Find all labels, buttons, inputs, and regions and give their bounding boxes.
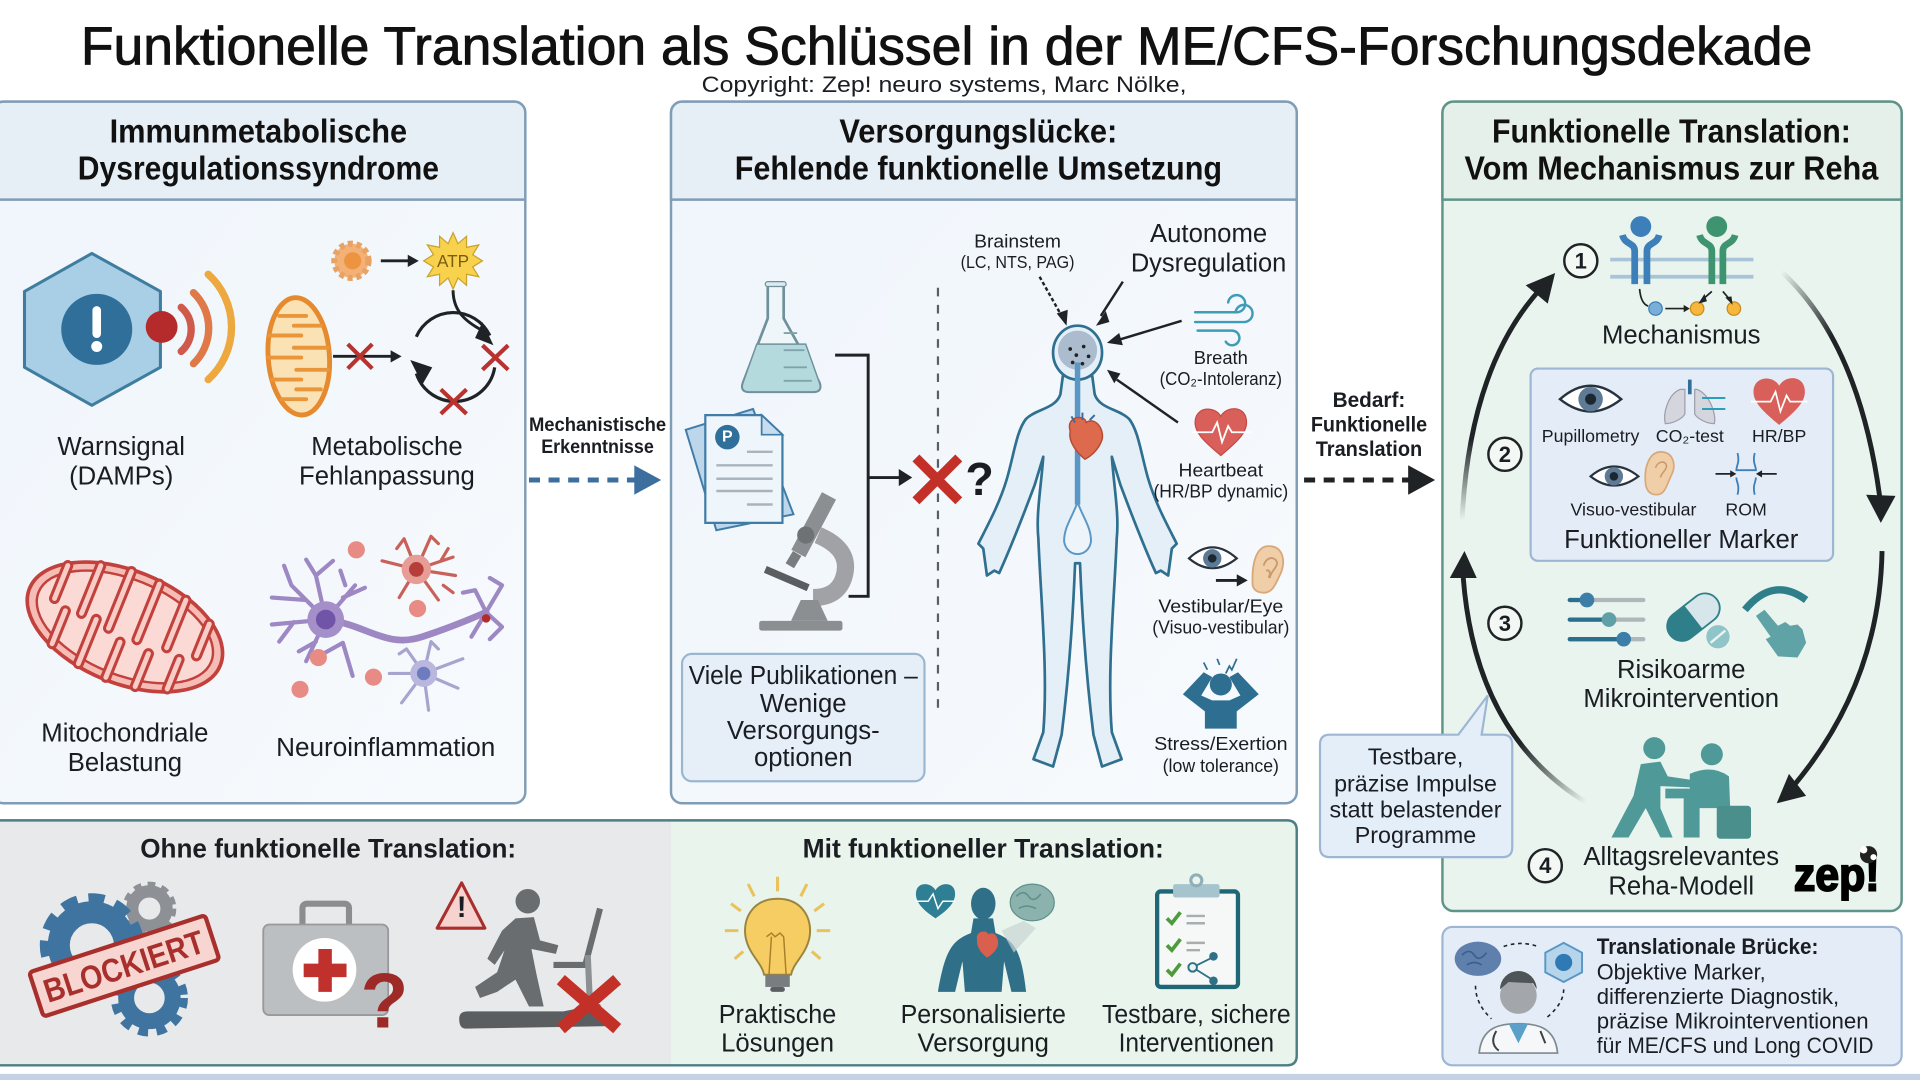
text: bridge description: Translationale Brücke:	[1597, 934, 1818, 959]
label: Personalisierte Versorgung: Versorgung	[918, 1029, 1049, 1057]
heading: Funktionelle Translation:	[1492, 114, 1851, 151]
label: Metabolische Fehlanpassung: Fehlanpassung	[299, 462, 475, 490]
text: bridge description: für ME/CFS und Long COVID	[1597, 1033, 1873, 1058]
arrows: inputs to brainstem	[1040, 277, 1182, 422]
label: Vestibular: (Visuo-vestibular)	[1152, 616, 1289, 637]
callout: Viele Publikationen: optionen	[754, 744, 853, 772]
step numbers: 4	[1539, 853, 1552, 878]
step numbers: 3	[1499, 611, 1511, 636]
stamp: BLOCKIERT: BLOCKIERT	[39, 924, 209, 1011]
label: Funktioneller Marker: Funktioneller Marker	[1564, 526, 1799, 554]
heading: ohne: Ohne funktionelle Translation:	[140, 834, 516, 864]
icon: blocked gears	[29, 885, 219, 1032]
label: Breath	[1160, 347, 1282, 389]
icon: medical kit with question: ?	[361, 956, 408, 1044]
icon: red mitochondrion	[8, 536, 241, 718]
arrow: Mechanistische Erkenntnisse: Mechanistische	[529, 414, 666, 436]
heading: Versorgungslücke:	[839, 114, 1117, 151]
text: bridge description: differenzierte Diagnostik,	[1597, 984, 1839, 1009]
icon: personalised care person	[916, 884, 1054, 992]
divider: dashed line	[937, 288, 939, 710]
icon: joint ROM	[1716, 453, 1777, 495]
arrow: Bedarf Funktionelle Translation: Translation	[1316, 438, 1422, 461]
label: Autonome Dysregulation: Dysregulation	[1131, 249, 1286, 277]
icon: neuron and inflammation	[272, 536, 502, 710]
text: bridge description: präzise Mikrointerventionen	[1597, 1009, 1869, 1034]
icon: receptors mechanism	[1610, 216, 1753, 315]
label: Testbare sichere Interventionen: Interventionen	[1119, 1029, 1274, 1057]
heading	[78, 114, 439, 187]
icon: flask	[742, 282, 820, 392]
label: Brainstem: Brainstem	[974, 231, 1061, 252]
callout: Viele Publikationen: Wenige	[760, 690, 847, 718]
icon: eye and ear	[1591, 452, 1674, 495]
arrow: Bedarf Funktionelle Translation: Funktionelle	[1311, 413, 1427, 436]
callout: Testbare Impulse: Programme	[1355, 822, 1476, 848]
label: Praktische Lösungen	[719, 1001, 836, 1057]
panel: Translationale Brücke	[1442, 927, 1902, 1065]
label: Alltagsrelevantes Reha-Modell	[1583, 843, 1779, 901]
label: Vestibular: Vestibular/Eye	[1158, 596, 1283, 617]
label: Stress	[1154, 733, 1288, 776]
label: Mitochondriale Belastung: Belastung	[68, 749, 182, 777]
label: Metabolische Fehlanpassung	[299, 433, 475, 490]
callout: Viele Publikationen: Versorgungs-	[727, 717, 880, 745]
callout: Testbare Impulse: Testbare,	[1368, 744, 1463, 770]
callout: Viele Publikationen: Viele Publikationen –	[689, 662, 918, 690]
icon: warning signal cell	[24, 253, 232, 405]
label: Alltagsrelevantes Reha-Modell: Reha-Modell	[1608, 873, 1754, 901]
panel: Versorgungslücke	[671, 102, 1297, 803]
copyright note: Copyright: Zep! neuro systems, Marc Nölke,	[702, 72, 1187, 97]
step numbers	[1488, 244, 1597, 882]
label: Metabolische Fehlanpassung: Metabolische	[311, 433, 463, 461]
label: Praktische Lösungen: Praktische	[719, 1001, 836, 1029]
arrow: Bedarf Funktionelle Translation	[1304, 389, 1435, 495]
label: Warnsignal	[57, 433, 185, 490]
icon: pill	[1661, 587, 1730, 648]
label: Mitochondriale Belastung: Mitochondriale	[41, 719, 208, 747]
icon: human body	[978, 326, 1177, 767]
label: Heartbeat: Heartbeat	[1179, 460, 1263, 481]
heading	[1464, 114, 1879, 187]
icon: red cross and question mark	[916, 453, 994, 505]
icon: red cross and question mark: ?	[965, 453, 994, 505]
icon: eye and ear	[1189, 546, 1283, 593]
label: Heartbeat: (HR/BP dynamic)	[1153, 481, 1288, 502]
label: Stress: Stress/Exertion	[1154, 733, 1288, 754]
icon: pupillometry eye	[1560, 386, 1621, 411]
label: Personalisierte Versorgung	[901, 1001, 1066, 1057]
label: Warnsignal: Warnsignal	[57, 433, 185, 461]
label: Brainstem: (LC, NTS, PAG)	[961, 252, 1074, 272]
callout: Testbare Impulse: präzise Impulse	[1334, 771, 1497, 797]
label: Risikoarme Mikrointervention: Risikoarme	[1617, 656, 1745, 684]
arrows: cycle	[1450, 272, 1896, 803]
heading: mit: Mit funktioneller Translation:	[803, 834, 1164, 864]
label: Breath: Breath	[1194, 347, 1248, 368]
icon: cell hexagon	[1545, 943, 1582, 982]
title: Funktionelle Translation als Schlüssel in der ME/CFS-Forschungsdekade	[81, 17, 1812, 77]
heading: Vom Mechanismus zur Reha	[1464, 150, 1879, 187]
label: Mechanismus: Mechanismus	[1602, 322, 1761, 350]
icon: medical kit with question	[263, 904, 408, 1044]
label: Neuroinflammation: Neuroinflammation	[276, 734, 495, 762]
callout: Testbare Impulse	[1320, 696, 1512, 857]
label: Breath: (CO₂-Intoleranz)	[1160, 368, 1282, 389]
icon: clipboard checklist	[1157, 875, 1238, 987]
icon: warning and treadmill runner	[437, 883, 617, 1029]
panel: comparison without and with translation	[0, 820, 1297, 1065]
step numbers: 2	[1499, 442, 1511, 467]
label: Heartbeat	[1153, 460, 1288, 502]
label: Testbare sichere Interventionen	[1102, 1001, 1291, 1057]
callout: Viele Publikationen	[682, 654, 924, 781]
icon: hand gesture	[1745, 590, 1806, 658]
heading: Dysregulationssyndrome	[78, 150, 439, 187]
label: Testbare sichere Interventionen: Testbare, sichere	[1102, 1001, 1291, 1029]
panel: Funktioneller Marker	[1531, 369, 1833, 561]
logo: zep: zep!	[1794, 848, 1880, 900]
label: Risikoarme Mikrointervention	[1583, 656, 1779, 713]
label: Autonome Dysregulation	[1131, 220, 1286, 277]
heading: Immunmetabolische	[110, 114, 407, 151]
label: Mitochondriale Belastung	[41, 719, 208, 777]
heading: Fehlende funktionelle Umsetzung	[735, 150, 1222, 187]
connector: bracket to gap	[835, 355, 912, 596]
icon: microscope	[759, 496, 846, 631]
labels row one	[1542, 426, 1806, 446]
label: Warnsignal: (DAMPs)	[69, 462, 173, 490]
icon: rehab people	[1611, 737, 1751, 839]
icon: sliders	[1570, 593, 1643, 647]
icon: publications: P	[722, 429, 733, 446]
icon: metabolic mismatch: ATP	[437, 251, 469, 271]
heading	[735, 114, 1222, 187]
label: Praktische Lösungen: Lösungen	[721, 1029, 834, 1057]
arrow: Mechanistische Erkenntnisse	[529, 414, 666, 495]
label: Personalisierte Versorgung: Personalisierte	[901, 1001, 1066, 1029]
icon: brain	[1455, 942, 1501, 976]
label: Stress: (low tolerance)	[1163, 755, 1279, 776]
callout: Testbare Impulse: statt belastender	[1330, 796, 1502, 822]
label: Vestibular	[1152, 596, 1289, 637]
panel: Funktionelle Translation	[1442, 102, 1902, 911]
icon: lungs	[1665, 380, 1725, 424]
icon: heartbeat	[1191, 409, 1251, 456]
panel: Immunmetabolische Dysregulationssyndrome	[0, 102, 525, 803]
label: Alltagsrelevantes Reha-Modell: Alltagsrelevantes	[1583, 843, 1779, 871]
label: Risikoarme Mikrointervention: Mikrointervention	[1583, 685, 1779, 713]
label: Brainstem	[961, 231, 1074, 272]
labels row two: Visuo-vestibular	[1570, 499, 1697, 519]
text: bridge description: Objektive Marker,	[1597, 960, 1766, 985]
label: Autonome Dysregulation: Autonome	[1150, 220, 1267, 248]
labels row one: Pupillometry	[1542, 426, 1640, 446]
labels row one: HR/BP	[1752, 426, 1806, 446]
step numbers: 1	[1575, 248, 1587, 273]
icon: doctor	[1476, 943, 1564, 1053]
icon: heart	[1751, 378, 1807, 425]
icon: light bulb	[725, 877, 830, 992]
icon: publications	[686, 409, 793, 530]
icon: stress figure	[1183, 659, 1259, 729]
labels row two: ROM	[1725, 499, 1767, 519]
icon: metabolic mismatch	[264, 233, 508, 417]
icon: breath	[1195, 295, 1253, 345]
icon: warning and treadmill runner: !	[457, 891, 467, 924]
arrow: Mechanistische Erkenntnisse: Erkenntnisse	[541, 436, 654, 458]
text: bridge description	[1597, 934, 1873, 1058]
arrow: Bedarf Funktionelle Translation: Bedarf:	[1333, 389, 1405, 412]
labels row two	[1570, 499, 1767, 519]
labels row one: CO₂-test	[1656, 426, 1724, 446]
